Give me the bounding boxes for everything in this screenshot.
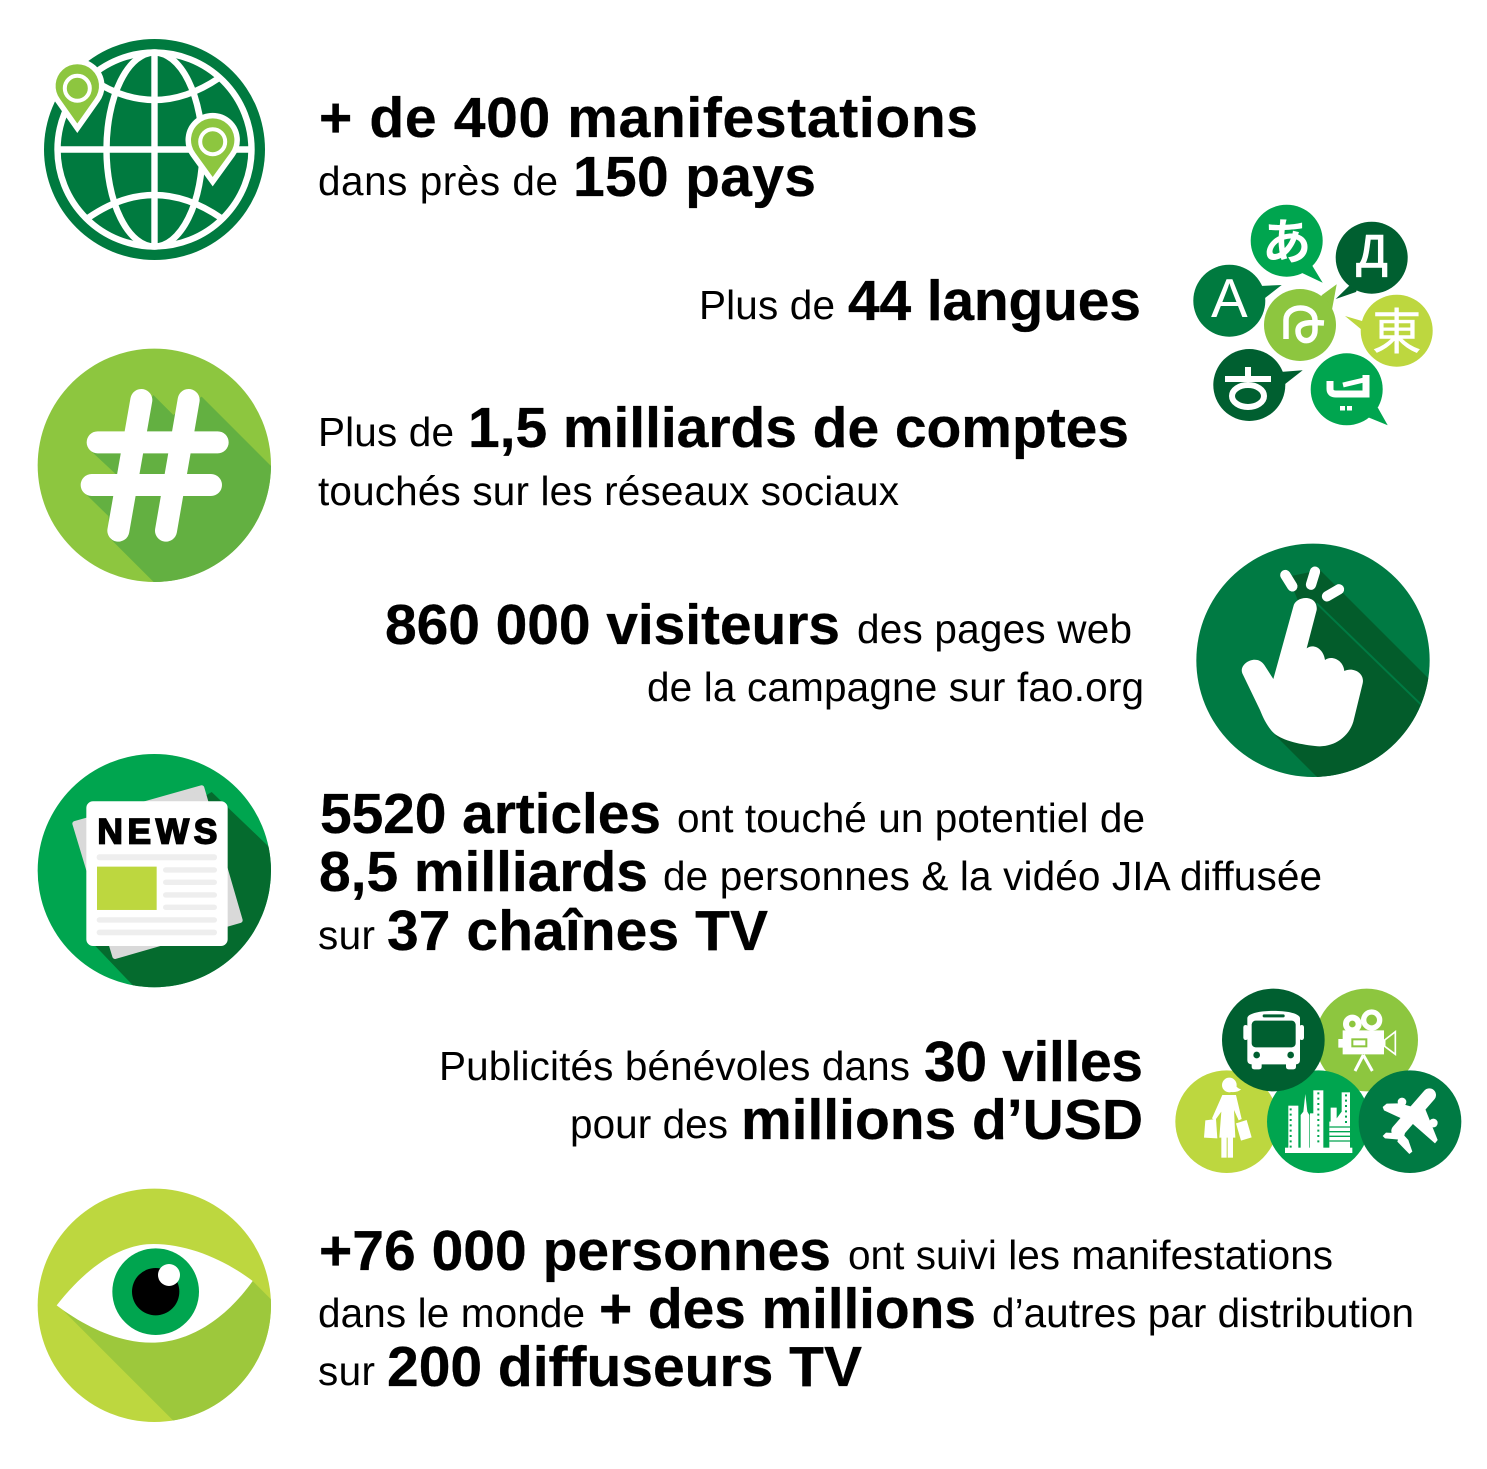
text: 5520 articles <box>318 782 1322 963</box>
icon: pointing hand click <box>1196 544 1430 777</box>
icon: advertising locations cluster <box>1175 989 1461 1173</box>
text: 400 manifestations: + de 400 manifestations <box>319 86 978 150</box>
text: 400 manifestations: dans près de <box>318 158 558 204</box>
text: 860 000 visiteurs: de la campagne sur fao.org <box>647 664 1144 710</box>
text: 5520 articles: 5520 articles <box>320 782 661 846</box>
text: 1,5 milliards de comptes <box>318 396 1129 514</box>
text: 5520 articles: ont touché un potentiel de <box>677 795 1145 841</box>
text: 30 villes: 30 villes <box>924 1030 1143 1094</box>
circle: film camera <box>1315 989 1418 1091</box>
text: 1,5 milliards de comptes: touchés sur les réseaux sociaux <box>318 468 899 514</box>
text: 76 000 personnes <box>318 1219 1414 1399</box>
bubble: cyrillic: Д <box>1356 225 1388 277</box>
text: 860 000 visiteurs: 860 000 visiteurs <box>385 593 840 657</box>
bubble: hiragana: あ <box>1262 216 1311 270</box>
text: 76 000 personnes: 200 diffuseurs TV <box>387 1335 862 1399</box>
bubble: kanji <box>1345 295 1433 367</box>
text: 5520 articles: de personnes & la vidéo JIA diffusée <box>663 853 1322 899</box>
icon: hashtag <box>38 348 271 582</box>
icon: language speech bubbles <box>1193 205 1433 425</box>
text: 76 000 personnes: dans le monde <box>318 1290 585 1336</box>
text: 860 000 visiteurs <box>385 593 1144 710</box>
text: 1,5 milliards de comptes: Plus de <box>318 409 454 455</box>
bubble: latin A <box>1193 265 1282 337</box>
text: 400 manifestations: 150 pays <box>573 145 816 209</box>
text: 30 villes: millions d’USD <box>741 1088 1143 1152</box>
text: 76 000 personnes: sur <box>318 1348 375 1394</box>
bubble: cyrillic <box>1336 222 1408 299</box>
icon: left map pin <box>56 64 99 124</box>
text: 44 langues: 44 langues <box>848 269 1141 333</box>
bubble: hiragana <box>1251 205 1323 283</box>
text: 44 langues: Plus de <box>699 282 835 328</box>
text: 30 villes: pour des <box>570 1101 728 1147</box>
text: 860 000 visiteurs: des pages web <box>857 606 1132 652</box>
text: 44 langues <box>699 269 1141 333</box>
icon: eye <box>38 1188 271 1422</box>
text: 30 villes <box>439 1030 1143 1152</box>
text: 5520 articles: 8,5 milliards <box>319 840 648 904</box>
circle: city skyline <box>1267 1070 1370 1173</box>
icon: right map pin <box>191 118 234 177</box>
text: 5520 articles: 37 chaînes TV <box>387 899 768 963</box>
text: 1,5 milliards de comptes: 1,5 milliards de comptes <box>468 396 1129 460</box>
bubble: arabic <box>1311 353 1388 425</box>
text: 76 000 personnes: +76 000 personnes <box>319 1219 831 1283</box>
circle: airplane <box>1359 1070 1461 1173</box>
text: 30 villes: Publicités bénévoles dans <box>439 1043 910 1089</box>
circle: shopper <box>1175 1070 1278 1173</box>
text: 76 000 personnes: d’autres par distribution <box>992 1290 1414 1336</box>
text: 76 000 personnes: ont suivi les manifestations <box>848 1232 1333 1278</box>
bubble: hangul <box>1213 349 1303 421</box>
icon: newspaper: NEWS <box>97 813 217 852</box>
bubble: latin A: A <box>1211 267 1248 329</box>
bubble: central script glyph <box>1264 284 1337 361</box>
text: 76 000 personnes: + des millions <box>599 1277 976 1341</box>
icon: newspaper <box>38 754 271 988</box>
text: 5520 articles: sur <box>318 912 375 958</box>
circle: bus <box>1222 989 1325 1091</box>
bubble: kanji: 東 <box>1372 306 1421 360</box>
text: 400 manifestations <box>318 86 978 209</box>
icon: globe with map pins <box>44 39 265 260</box>
